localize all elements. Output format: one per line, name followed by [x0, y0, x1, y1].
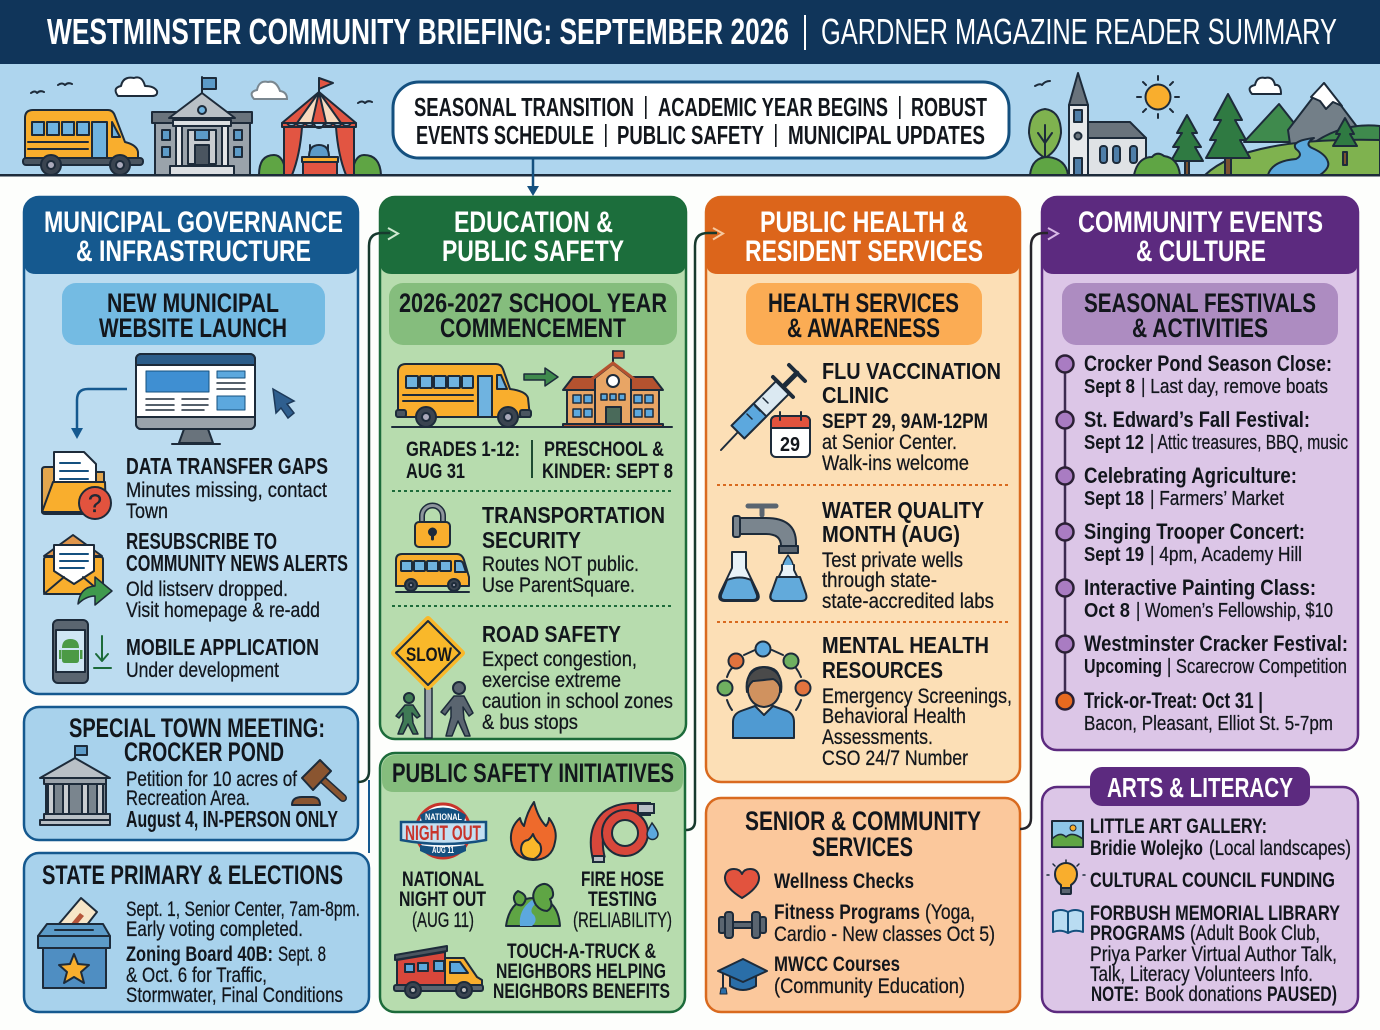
text: school start dates: [406, 438, 673, 483]
subheading: website launch: WEBSITE LAUNCH: [99, 313, 287, 343]
icon: mountains, pines and river: [1134, 83, 1380, 175]
item: transportation security: TRANSPORTATION: [482, 502, 665, 528]
item: flu vaccination clinic: 29: [780, 434, 800, 456]
item: Forbush memorial library: (Adult Book Club,: [1190, 922, 1320, 945]
event: Crocker Pond: Crocker Pond Season Close:: [1084, 351, 1332, 376]
text: school start dates: AUG 31: [406, 460, 465, 483]
icon: national night out badge: NIGHT OUT: [405, 822, 481, 845]
icon: bus to school: [392, 351, 672, 427]
event: Celebrating Agriculture: [1084, 463, 1297, 510]
subheading: health services: [746, 283, 982, 345]
heading: public safety initiatives: [382, 755, 683, 792]
event: Crocker Pond: [1084, 351, 1332, 398]
event: Singing Trooper: Singing Trooper Concert:: [1084, 519, 1305, 544]
heading: education: [380, 197, 686, 274]
event: St. Edward's festival: St. Edward’s Fall Festival:: [1084, 407, 1310, 432]
text: touch-a-truck and benefits: NEIGHBORS BENEFITS: [493, 980, 670, 1003]
heading: municipal governance: [24, 197, 358, 274]
subheading: school year: COMMENCEMENT: [440, 313, 626, 343]
text: fire hose testing: FIRE HOSE: [581, 868, 664, 891]
item: Forbush memorial library: NOTE:: [1091, 983, 1139, 1006]
panel: state primary and elections: & Oct. 6 for Traffic,: [126, 964, 267, 987]
icon: syringe and calendar: [721, 365, 810, 457]
icon: school bus: [23, 110, 143, 175]
panel: senior and community services: Wellness Checks: [774, 870, 914, 893]
item: Forbush memorial library: PROGRAMS: [1090, 922, 1185, 945]
item: road safety: Expect congestion,: [482, 648, 637, 671]
panel: special town meeting: Petition for 10 acres of: [126, 768, 297, 791]
event: Singing Trooper: [1084, 519, 1305, 566]
event: Celebrating Agriculture: Celebrating Agriculture:: [1084, 463, 1297, 488]
panel: senior and community services: SERVICES: [812, 832, 913, 862]
illustrated scene band: [0, 64, 1380, 176]
panel: senior and community services: Fitness Programs: [774, 901, 920, 924]
event: Trick-or-Treat: [1084, 688, 1333, 735]
event: Singing Trooper: | 4pm, Academy Hill: [1150, 544, 1302, 566]
item: flu vaccination clinic: SEPT 29, 9AM-12PM: [822, 410, 988, 433]
panel: state primary and elections: [24, 853, 369, 1012]
event: Cracker Festival: | Scarecrow Competition: [1167, 656, 1347, 678]
panel: senior and community services: (Yoga,: [925, 901, 975, 924]
item: resubscribe to news alerts: Visit homepage & re-add: [126, 599, 320, 622]
item: road safety: SLOW: [406, 645, 452, 666]
subheading: school year: 2026-2027 SCHOOL YEAR: [399, 288, 667, 318]
item: road safety: [394, 619, 673, 738]
panel: state primary and elections: STATE PRIMARY & ELECTIONS: [42, 860, 343, 890]
text: fire hose testing: [573, 868, 672, 932]
icon: festival tent: [259, 78, 381, 175]
subheading: seasonal festivals: [1062, 283, 1338, 345]
item: Forbush memorial library: PAUSED): [1267, 983, 1337, 1006]
text: national night out: (AUG 11): [412, 909, 474, 932]
text: fire hose testing: TESTING: [588, 888, 657, 911]
item: data transfer gaps: Minutes missing, contact: [126, 479, 327, 502]
event: Crocker Pond: Sept 8: [1084, 376, 1135, 398]
item: data transfer gaps: DATA TRANSFER GAPS: [126, 453, 328, 479]
item: flu vaccination clinic: CLINIC: [822, 382, 889, 408]
icon: lock and bus: [396, 506, 469, 592]
panel: state primary and elections: Sept. 8: [278, 943, 326, 966]
event: Celebrating Agriculture: Sept 18: [1084, 488, 1144, 510]
item: road safety: & bus stops: [482, 711, 578, 734]
heading: municipal governance: & INFRASTRUCTURE: [76, 235, 311, 268]
heading: municipal governance: MUNICIPAL GOVERNANCE: [44, 206, 343, 239]
subheading: seasonal festivals: SEASONAL FESTIVALS: [1084, 288, 1316, 318]
icon: civic building: [40, 746, 110, 825]
event: Trick-or-Treat: Bacon, Pleasant, Elliot St. 5-7pm: [1084, 713, 1333, 735]
icon: website monitor: [136, 354, 255, 444]
icon: sun and cloud: [1137, 76, 1281, 118]
subtitle callout: [393, 82, 1009, 158]
panel: special town meeting: August 4, IN-PERSON ONLY: [126, 806, 338, 832]
item: mental health resources: [718, 632, 1012, 770]
event: St. Edward's festival: Sept 12: [1084, 432, 1144, 454]
arrow: health column connector: [1020, 228, 1058, 829]
subheading: school year: [389, 283, 677, 345]
item: transportation security: [396, 502, 665, 597]
panel: special town meeting: CROCKER POND: [124, 737, 284, 767]
item: resubscribe to news alerts: COMMUNITY NEWS ALERTS: [126, 550, 348, 576]
icon: fire hose: [593, 804, 658, 862]
text: national night out: [399, 868, 486, 932]
panel: community events and culture: [1042, 197, 1358, 750]
icon: flame: [511, 802, 556, 860]
panel: senior and community services: Cardio - New classes Oct 5): [774, 923, 995, 946]
item: mobile application: MOBILE APPLICATION: [126, 634, 319, 660]
arrow: website to items: [71, 389, 127, 439]
item: resubscribe to news alerts: [44, 528, 348, 622]
subheading: website launch: NEW MUNICIPAL: [107, 288, 279, 318]
icon: open book: [1053, 910, 1083, 933]
item: flu vaccination clinic: Walk-ins welcome: [822, 452, 969, 475]
item: mobile application: [53, 620, 319, 683]
panel: state primary and elections: Zoning Board 40B:: [126, 943, 273, 966]
icon: person with connected circles: [718, 642, 810, 738]
text: national night out: NIGHT OUT: [399, 888, 486, 911]
heading: public health: RESIDENT SERVICES: [745, 235, 983, 268]
item: road safety: caution in school zones: [482, 690, 673, 713]
panel: special town meeting: Recreation Area.: [126, 787, 250, 810]
icon: national night out badge: [401, 804, 486, 858]
item: flu vaccination clinic: at Senior Center.: [822, 431, 957, 454]
icon: gavel: [292, 760, 343, 805]
text: touch-a-truck and benefits: [493, 940, 670, 1003]
item: resubscribe to news alerts: Old listserv dropped.: [126, 578, 288, 601]
heading: public health: [706, 197, 1020, 274]
panel: state primary and elections: Sept. 1, Senior Center, 7am-8pm.: [126, 898, 360, 921]
subheading: health services: HEALTH SERVICES: [768, 288, 959, 318]
text: national night out: NATIONAL: [402, 868, 484, 891]
event: Painting class: Interactive Painting Class:: [1084, 575, 1316, 600]
item: little art gallery: [1052, 815, 1351, 860]
item: water quality month: Test private wells: [822, 549, 963, 572]
item: road safety: exercise extreme: [482, 669, 621, 692]
subheading: health services: & AWARENESS: [787, 313, 940, 343]
item: mental health resources: CSO 24/7 Number: [822, 747, 968, 770]
item: mental health resources: Emergency Screenings,: [822, 685, 1012, 708]
panel: state primary and elections: Early voting completed.: [126, 918, 303, 941]
item: water quality month: [719, 497, 994, 613]
item: transportation security: SECURITY: [482, 527, 581, 553]
text: touch-a-truck and benefits: NEIGHBORS HELPING: [496, 960, 666, 983]
icon: town hall: [152, 77, 252, 175]
event: Cracker Festival: Upcoming: [1084, 656, 1162, 678]
heading: arts and literacy: [1090, 767, 1310, 806]
text: school start dates: KINDER: SEPT 8: [542, 460, 673, 483]
text: school start dates: GRADES 1-12:: [406, 438, 520, 461]
event: Painting class: | Women’s Fellowship, $10: [1136, 600, 1333, 622]
item: transportation security: Routes NOT public.: [482, 553, 639, 576]
icon: national night out badge: NATIONAL: [425, 812, 462, 822]
icon: landscape picture: [1052, 821, 1083, 847]
icon: fire truck: [394, 946, 483, 998]
subtitle callout: PUBLIC SAFETY: [617, 120, 764, 150]
text: touch-a-truck and benefits: TOUCH-A-TRUCK &: [507, 940, 656, 963]
heading: community events: & CULTURE: [1136, 235, 1266, 268]
panel: education and public safety: [380, 197, 686, 739]
event: Trick-or-Treat: Trick-or-Treat: Oct 31 |: [1084, 688, 1263, 713]
item: transportation security: Use ParentSquare.: [482, 574, 635, 597]
icon: national night out badge: AUG 11: [432, 845, 454, 855]
panel: senior and community services: [706, 798, 1020, 1012]
panel: special town meeting: SPECIAL TOWN MEETING:: [69, 713, 325, 743]
subtitle callout: SEASONAL TRANSITION: [414, 92, 634, 122]
item: cultural council funding: [1047, 860, 1335, 894]
title banner: [0, 0, 1380, 64]
panel: arts and literacy: [1042, 767, 1358, 1012]
subtitle callout: ROBUST: [911, 92, 987, 122]
icon: neighbors trees: [506, 884, 560, 926]
item: data transfer gaps: [42, 452, 328, 523]
item: Forbush memorial library: Talk, Literacy Volunteers Info.: [1090, 963, 1313, 986]
item: Forbush memorial library: Priya Parker Virtual Author Talk,: [1090, 943, 1337, 966]
icon: dumbbell: [719, 912, 766, 938]
panel: state primary and elections: Stormwater, Final Conditions: [126, 984, 343, 1007]
item: data transfer gaps: Town: [126, 500, 168, 523]
icon: light bulb: [1047, 860, 1085, 894]
arrow: callout to columns: [527, 158, 539, 196]
heading: public health: PUBLIC HEALTH &: [760, 206, 968, 239]
event: St. Edward's festival: [1084, 407, 1348, 454]
item: water quality month: through state-: [822, 569, 937, 592]
icon: heart: [725, 869, 759, 898]
icon: faucet and flasks: [719, 506, 806, 601]
item: flu vaccination clinic: FLU VACCINATION: [822, 358, 1001, 384]
item: mental health resources: RESOURCES: [822, 657, 943, 683]
item: little art gallery: Bridie Wolejko: [1090, 837, 1203, 860]
panel: public safety initiatives: [380, 753, 685, 1012]
item: water quality month: state-accredited labs: [822, 590, 994, 613]
text: school start dates: PRESCHOOL &: [544, 438, 664, 461]
item: mental health resources: Behavioral Health: [822, 705, 966, 728]
icon: folder with question: [42, 452, 111, 519]
text: fire hose testing: (RELIABILITY): [573, 909, 672, 932]
panel: special town meeting: [24, 707, 358, 840]
icon: church and tree: [1029, 73, 1146, 175]
heading: community events: [1042, 197, 1358, 274]
subheading: seasonal festivals: & ACTIVITIES: [1132, 313, 1268, 343]
panel: senior and community services: MWCC Courses: [774, 953, 900, 976]
item: water quality month: WATER QUALITY: [822, 497, 984, 523]
icon: envelope with arrow: [44, 535, 112, 605]
item: mental health resources: Assessments.: [822, 726, 933, 749]
icon: graduation cap: [718, 959, 767, 994]
icon: phone with android: [53, 620, 111, 683]
item: road safety: ROAD SAFETY: [482, 621, 621, 647]
title banner: WESTMINSTER COMMUNITY BRIEFING: SEPTEMBER 2026: [47, 11, 789, 52]
icon: cursor arrow: [273, 389, 294, 418]
panel: senior and community services: (Community Education): [774, 975, 965, 998]
item: flu vaccination clinic: [721, 358, 1001, 475]
item: water quality month: MONTH (AUG): [822, 521, 960, 547]
icon: slow sign and pedestrians: [394, 619, 473, 738]
heading: arts and literacy: ARTS & LITERACY: [1107, 772, 1293, 803]
event: Crocker Pond: | Last day, remove boats: [1141, 376, 1328, 398]
event: Cracker Festival: [1084, 631, 1348, 678]
subtitle callout: MUNICIPAL UPDATES: [788, 120, 985, 150]
heading: education: EDUCATION &: [454, 206, 613, 239]
event: Celebrating Agriculture: | Farmers’ Market: [1150, 488, 1284, 510]
item: mobile application: Under development: [126, 659, 279, 682]
item: mental health resources: MENTAL HEALTH: [822, 632, 989, 658]
item: little art gallery: LITTLE ART GALLERY:: [1090, 815, 1267, 838]
heading: public safety initiatives: PUBLIC SAFETY INITIATIVES: [392, 758, 674, 788]
subheading: website launch: [62, 283, 325, 345]
icon: birds and clouds left: [31, 77, 372, 103]
item: little art gallery: (Local landscapes): [1209, 837, 1351, 860]
timeline: [1056, 356, 1074, 710]
arrow: municipal column connector: [358, 228, 398, 853]
item: Forbush memorial library: Book donations: [1145, 983, 1262, 1006]
event: Painting class: [1084, 575, 1333, 622]
event: Painting class: Oct 8: [1084, 600, 1130, 622]
subtitle callout: EVENTS SCHEDULE: [416, 120, 594, 150]
panel: public health and resident services: [706, 197, 1020, 782]
subtitle callout: ACADEMIC YEAR BEGINS: [658, 92, 888, 122]
item: Forbush memorial library: [1053, 902, 1340, 1006]
panel: senior and community services: SENIOR & COMMUNITY: [745, 806, 981, 836]
icon: folder with question: ?: [88, 490, 102, 518]
item: resubscribe to news alerts: RESUBSCRIBE TO: [126, 528, 277, 554]
heading: education: PUBLIC SAFETY: [442, 235, 624, 268]
event: Singing Trooper: Sept 19: [1084, 544, 1144, 566]
icon: ballot box: [38, 898, 110, 988]
panel: municipal governance: [24, 197, 358, 694]
arrow: education column connector: [686, 228, 723, 830]
